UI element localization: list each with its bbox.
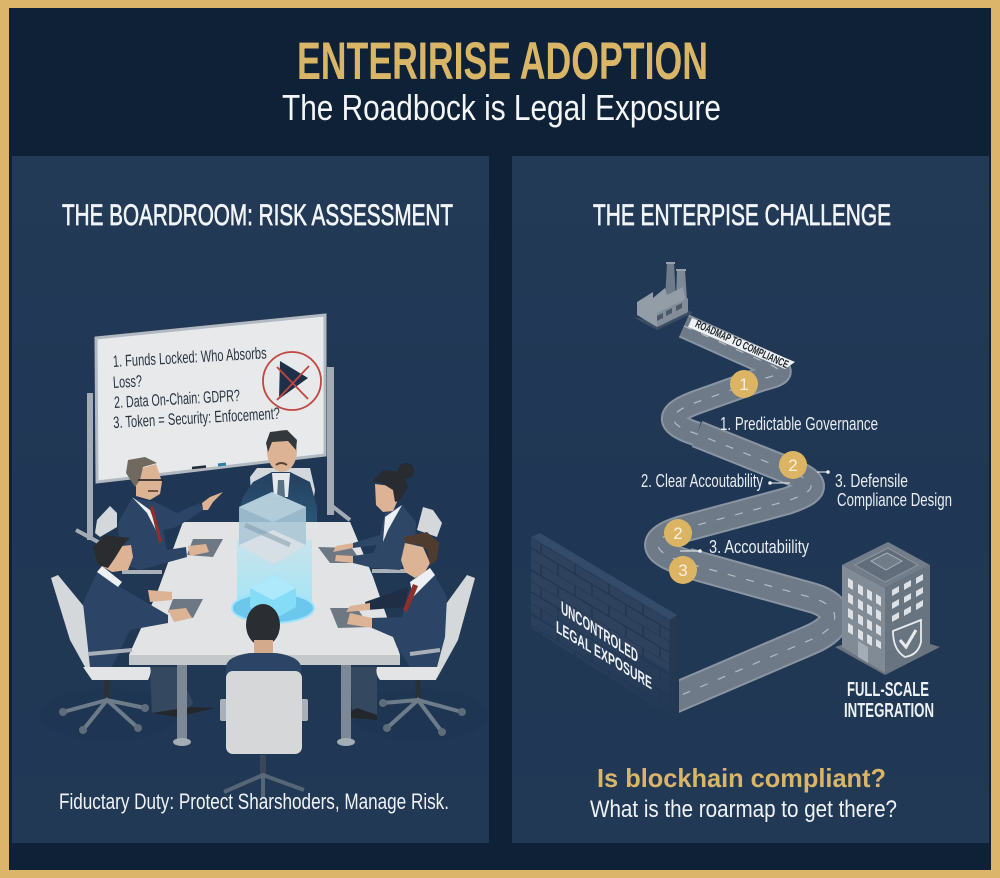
conference table [129,522,400,746]
whiteboard text: 3. Token = Security: Enfocement? [113,405,280,432]
person: back of head with chair [220,604,308,797]
chair: back left [95,506,117,537]
road sign: roadmap to compliance [688,318,795,371]
road labels [641,414,952,557]
tablets on table [168,539,370,628]
whiteboard text: 1. Funds Locked: Who Absorbs [112,344,267,371]
panel: boardroom [12,156,489,843]
road labels: 3. Accoutabiility [709,537,809,557]
road step badges: 2 [788,456,798,475]
whiteboard [96,315,325,482]
road step badges: 3 [678,561,688,580]
hologram: blockchain cube on table [232,492,314,623]
icon: factory [633,263,693,330]
road labels: 2. Clear Accoutability [641,471,763,491]
title: ENTERIRISE ADOPTION [297,32,708,91]
road step badges [664,370,807,584]
question: roadmap: What is the roarmap to get there? [590,796,897,823]
wall label [556,598,652,693]
wall label: LEGAL EXPOSURE [556,616,652,693]
building windows [848,574,923,649]
whiteboard text: Loss? [113,372,142,392]
road labels: 1. Predictable Governance [720,414,878,434]
person: left presenter [118,457,223,570]
whiteboard text [109,344,280,432]
question: compliance: Is blockhain compliant? [597,763,886,793]
person: right woman [333,463,416,570]
road labels: 3. Defensile [835,471,908,491]
person: front left [83,535,192,667]
icon: office building with shield [835,542,940,675]
chair: back right [417,507,442,537]
whiteboard stand [76,367,350,543]
winding road [658,326,835,702]
person: center [240,430,317,560]
person: front right [346,532,447,667]
road labels: Compliance Design [837,490,952,510]
road step badges: 1 [739,375,749,394]
icon: crossed-out play symbol [263,352,321,410]
panel: enterprise challenge [512,156,989,843]
building label [844,679,934,722]
building label: FULL-SCALE [847,679,929,701]
whiteboard text: 2. Data On-Chain: GDPR? [114,387,240,412]
building label: INTEGRATION [844,700,934,722]
chair: front right with legs [340,575,475,736]
far armrests [122,571,410,572]
subtitle: The Roadbock is Legal Exposure [282,87,721,128]
wall: uncontrolled legal exposure [531,533,677,715]
heading: boardroom: THE BOARDROOM: RISK ASSESSMENT [62,199,453,232]
floor shadows [40,689,488,741]
caption: fiduciary duty: Fiductary Duty: Protect Sharshoders, Manage Risk. [59,789,449,814]
road sign: roadmap to compliance: ROADMAP TO COMPLIANCE [693,318,790,371]
chair: front left with legs [51,575,215,734]
road step badges: 2 [673,524,683,543]
shield check [893,620,921,657]
wall label: UNCONTROLED [561,598,638,668]
connector lines [680,471,829,552]
